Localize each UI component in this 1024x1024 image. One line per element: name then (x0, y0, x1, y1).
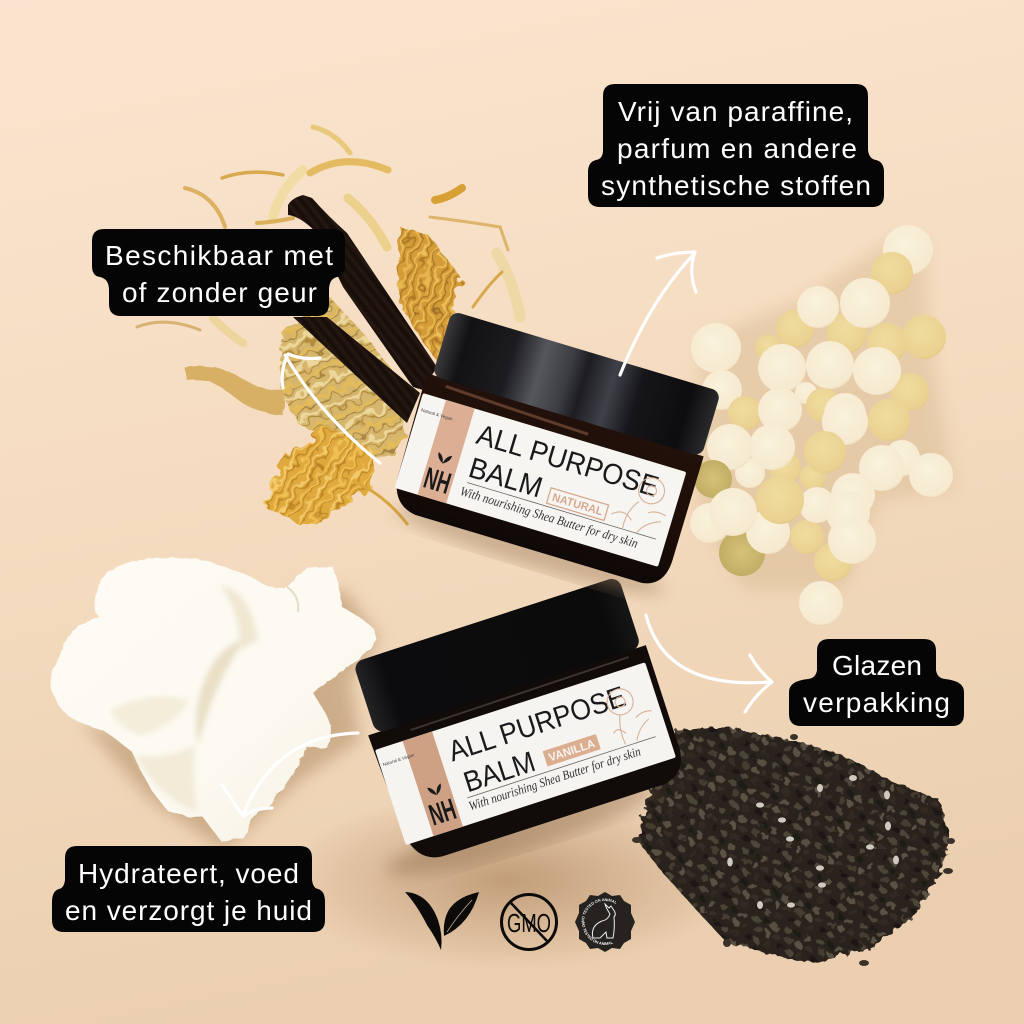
callout: glass: Glazen (832, 650, 922, 681)
wax pellets (690, 225, 955, 625)
logo text: NH (420, 462, 454, 501)
flower lower lobe (263, 425, 372, 527)
flower middle lobe (280, 297, 407, 463)
logo leaf (427, 783, 444, 797)
background shadow near jars and badges (280, 790, 740, 970)
product name: ALL PURPOSE (473, 419, 662, 504)
shea crease shading (196, 640, 245, 745)
bottom jar shadow (380, 770, 660, 890)
top jar shadow (391, 494, 669, 606)
logo strip (418, 400, 475, 503)
jar label (395, 393, 686, 567)
vanilla pods (288, 195, 437, 423)
jar glass body (368, 645, 689, 867)
callout: free from (588, 84, 884, 207)
callout: hydrate (52, 846, 325, 932)
icon: no GMO (502, 894, 556, 950)
arrow: to free-from callout (620, 252, 696, 375)
tagline: With nourishing Shea Butter for dry skin (458, 483, 640, 551)
icon: not tested on animals badge (575, 892, 635, 952)
callout: free from: Vrij van paraffine, (618, 96, 853, 127)
chia seed pile (632, 727, 955, 966)
flower tail petal (185, 366, 285, 416)
callout: scent: of zonder geur (122, 277, 317, 308)
product name: ALL PURPOSE (445, 681, 630, 768)
jar: natural (top) (387, 309, 723, 589)
logo text: NH (425, 793, 460, 832)
shea butter (50, 558, 380, 850)
icon: no GMO: GMO (507, 908, 551, 938)
jar: vanilla (bottom) (345, 575, 689, 867)
jar lid (432, 311, 721, 457)
flower bottom strands (355, 482, 408, 525)
product name line 2: BALM (465, 452, 546, 504)
flower upper lobe (397, 227, 463, 362)
callout: hydrate: Hydrateert, voed (78, 858, 299, 889)
callout: scent (92, 229, 345, 316)
icon: not tested on animals badge: NO TESTED ON ANIMAL (581, 898, 616, 922)
natural tag: NATURAL (551, 492, 604, 518)
product name line 2: BALM (460, 746, 539, 799)
rule under name (467, 482, 656, 539)
shea body (50, 558, 377, 843)
icon: not tested on animals badge: NO TESTED ON ANIMAL (582, 922, 614, 945)
marigold flower (185, 227, 463, 527)
arrow: to scent callout (282, 354, 380, 463)
wax pellet soft shadow (700, 240, 955, 590)
dried petals scattered (137, 127, 520, 343)
flower line art (608, 469, 675, 539)
jar lid (353, 576, 641, 734)
arrow: to glass callout (646, 615, 772, 712)
vanilla tag: VANILLA (547, 738, 597, 764)
arrow: to shea callout (222, 733, 358, 816)
glass highlight (444, 386, 590, 434)
jar glass body (387, 373, 704, 589)
flower line art (601, 681, 659, 747)
callout: free from: parfum en andere (617, 133, 857, 164)
callout: free from: synthetische stoffen (601, 170, 871, 201)
callout: hydrate: en verzorgt je huid (65, 895, 312, 926)
callout: scent: Beschikbaar met (105, 240, 333, 271)
icon: vegan leaf (405, 892, 479, 950)
shea shadow (80, 590, 380, 850)
jar label (375, 662, 676, 845)
side small print: Natural & Vegan (420, 407, 454, 422)
callout: glass: verpakking (803, 687, 950, 718)
callout: glass (789, 639, 964, 726)
glass highlight (410, 657, 629, 730)
logo leaf (436, 452, 452, 466)
rule under name (467, 737, 656, 798)
logo strip (403, 731, 463, 836)
tagline: With nourishing Shea Butter for dry skin (467, 743, 642, 813)
side small print: Natural & Vegan (382, 752, 415, 767)
